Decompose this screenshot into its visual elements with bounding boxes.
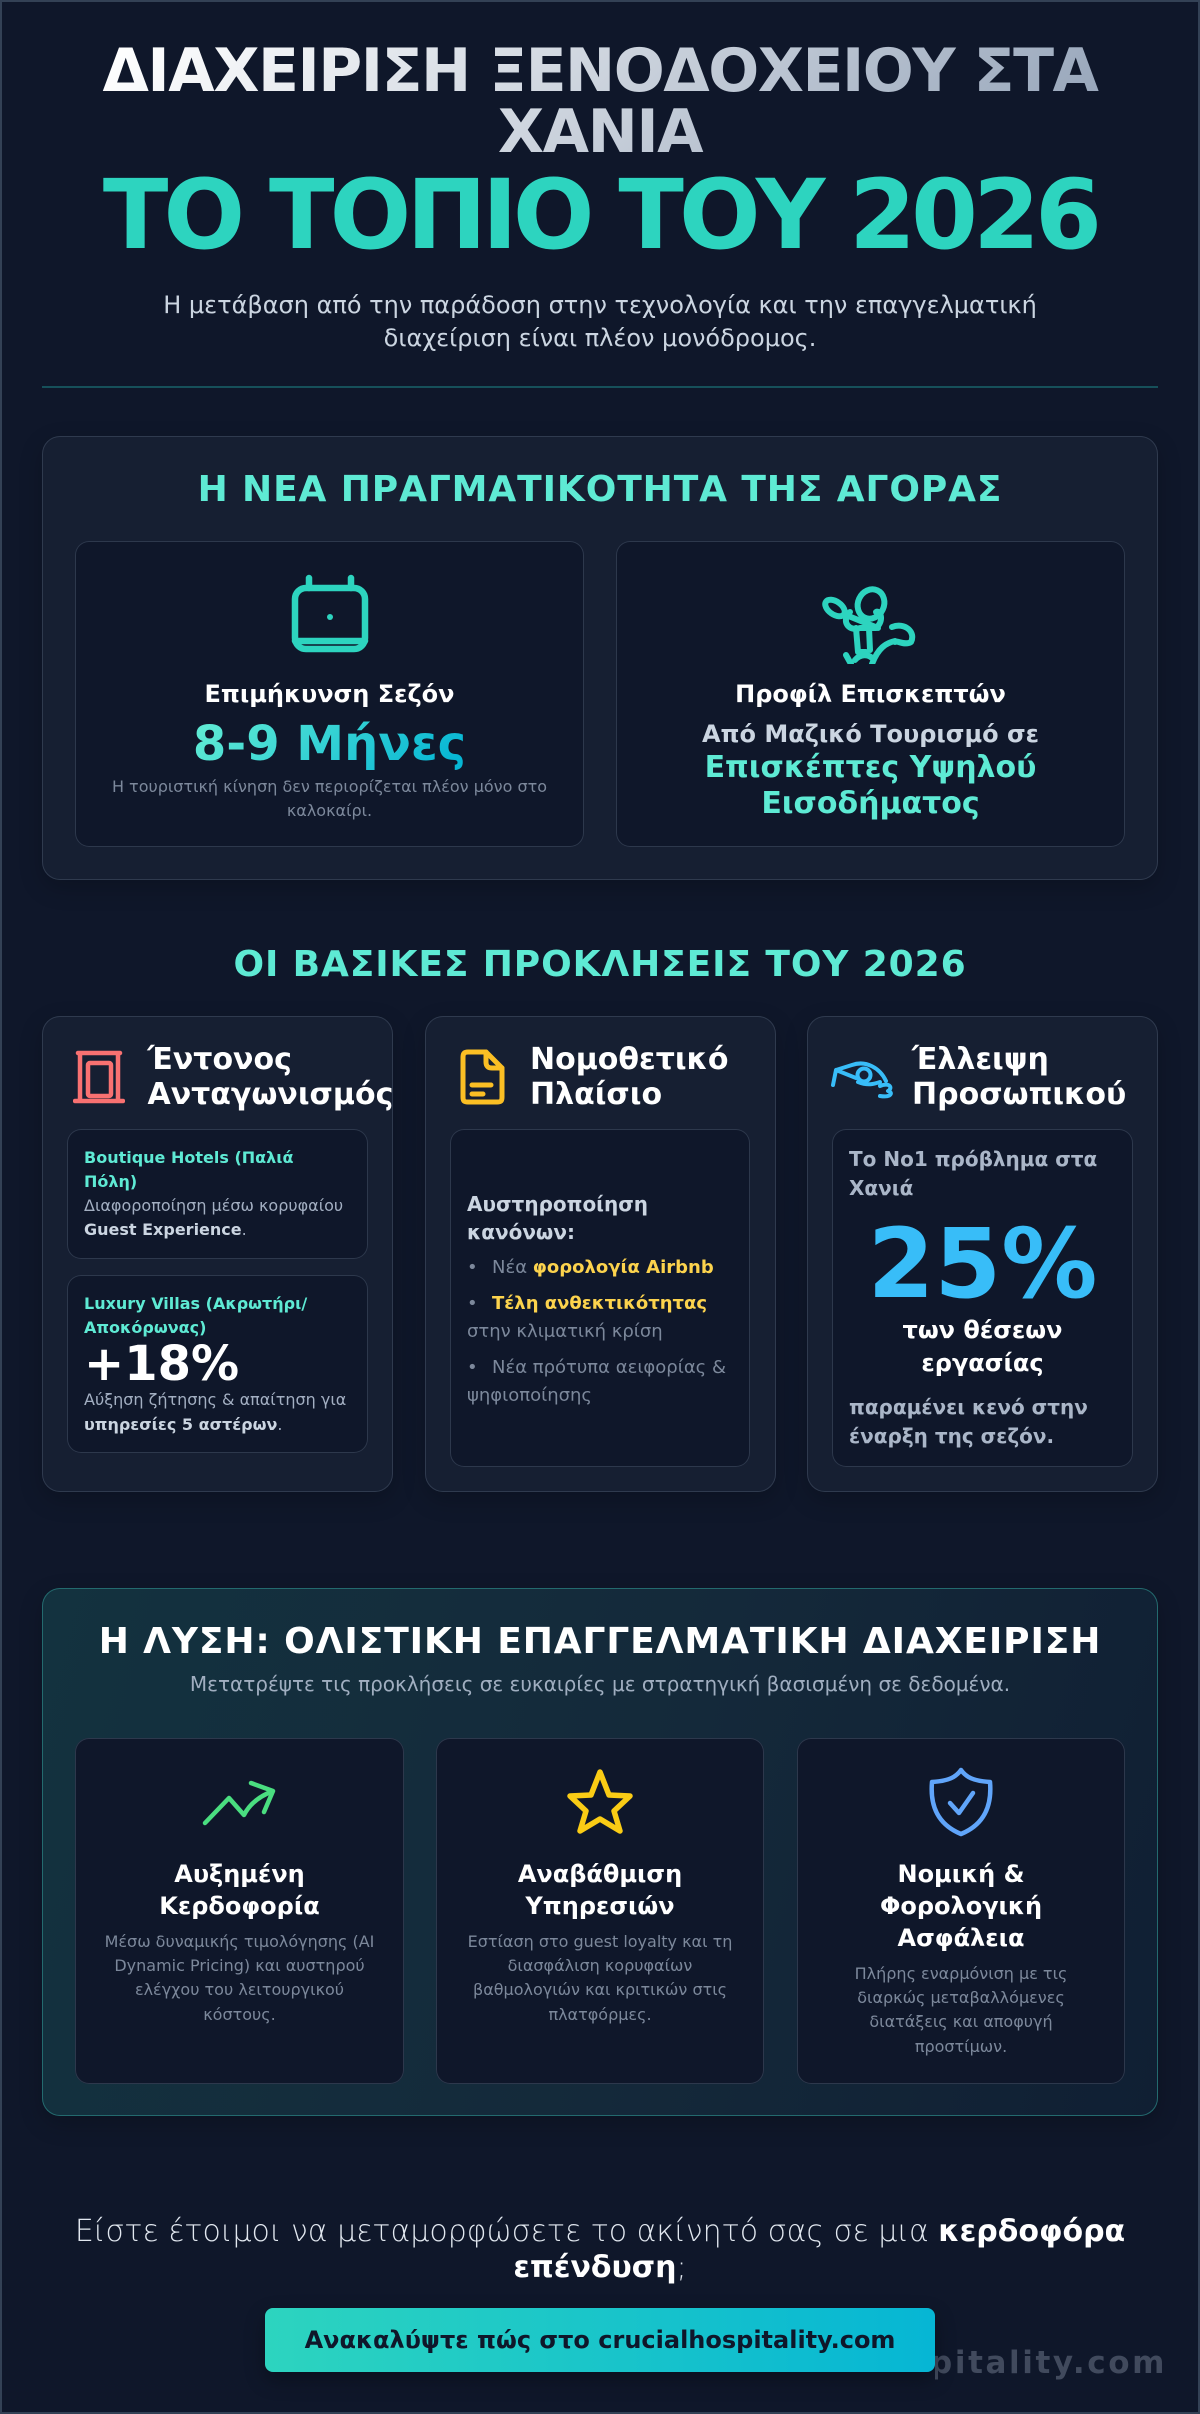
bullet: resilience fees: • — [467, 1293, 478, 1314]
box: stricter rules — [450, 1129, 750, 1467]
text: high income visitors — [705, 750, 1036, 821]
text: boutique description — [84, 1196, 343, 1239]
heading: challenges: ΟΙ ΒΑΣΙΚΕΣ ΠΡΟΚΛΗΣΕΙΣ ΤΟΥ 2026 — [233, 944, 967, 984]
text: remains vacant: έναρξη της σεζόν. — [849, 1424, 1054, 1448]
text: boutique description: Guest Experience. — [84, 1220, 247, 1239]
heading: legislation: Νομοθετικό — [530, 1042, 728, 1076]
stat: +18%: +18% — [84, 1336, 239, 1392]
card: season extension — [75, 541, 584, 847]
text: profitability description — [105, 1932, 374, 2024]
panel: staff shortage — [807, 1016, 1158, 1492]
text: number one problem: Το Νο1 πρόβλημα στα — [849, 1147, 1097, 1171]
list: rule changes — [467, 1257, 726, 1406]
text: boutique description: Διαφοροποίηση μέσω κορυφαίου — [84, 1196, 343, 1215]
icon: door — [73, 1050, 125, 1104]
icon: blue staff glyph — [831, 1061, 893, 1098]
text: services description: Εστίαση στο guest loyalty και τη — [468, 1932, 732, 1951]
stat: 8-9 months — [75, 714, 584, 774]
text: closing question — [75, 2214, 1125, 2285]
text: of positions: εργασίας — [921, 1348, 1044, 1376]
bullet: sustainability — [467, 1357, 726, 1406]
text: high income visitors: Επισκέπτες Υψηλού — [705, 750, 1036, 785]
text: villas label: Luxury Villas (Ακρωτήρι/ — [84, 1294, 307, 1313]
icon: trend arrow — [202, 1780, 276, 1826]
heading: profitability: Αυξημένη — [174, 1860, 305, 1888]
title: highlighted year line: ΤΟ ΤΟΠΙΟ ΤΟΥ 2026 — [103, 159, 1097, 271]
heading: legal safety: Ασφάλεια — [898, 1924, 1024, 1952]
button: call to action: Ανακαλύψτε πώς στο crucialhospitality.com — [305, 2326, 895, 2354]
icon: star — [567, 1769, 633, 1834]
panel: holistic solution — [42, 1588, 1158, 2116]
text: legal description — [855, 1964, 1067, 2056]
heading: legal safety: Φορολογική — [880, 1892, 1042, 1920]
text: boutique label: Boutique Hotels (Παλιά — [84, 1148, 293, 1167]
panel: legislation — [425, 1016, 776, 1492]
heading: services — [518, 1860, 682, 1920]
text: boutique label — [84, 1148, 293, 1191]
heading: legislation — [530, 1042, 728, 1112]
text: villas description: υπηρεσίες 5 αστέρων. — [84, 1415, 282, 1434]
icon: calendar — [292, 574, 368, 652]
stat: 25%: 25% — [868, 1208, 1097, 1320]
text: remains vacant: παραμένει κενό στην — [849, 1395, 1088, 1419]
text: profitability description: κόστους. — [203, 2005, 276, 2024]
heading: legal safety — [880, 1860, 1042, 1952]
text: of positions — [902, 1316, 1062, 1376]
text: legal description: Πλήρης εναρμόνιση με τις — [855, 1964, 1067, 1983]
heading: competition — [146, 1042, 393, 1112]
text: profitability description: Μέσω δυναμικής τιμολόγησης (AI — [105, 1932, 374, 1951]
box: boutique hotels — [67, 1129, 368, 1259]
text: services description: βαθμολογιών και κριτικών στις — [473, 1980, 727, 1999]
button: call to action — [265, 2308, 935, 2372]
text: services description: πλατφόρμες. — [548, 2005, 652, 2024]
heading: competition: Έντονος — [148, 1042, 292, 1076]
text: stricter rules label: Αυστηροποίηση — [467, 1192, 648, 1216]
text: boutique label: Πόλη) — [84, 1172, 137, 1191]
text: number one problem: Χανιά — [849, 1176, 913, 1200]
heading: staff shortage: Έλλειψη — [912, 1042, 1049, 1076]
text: season description: καλοκαίρι. — [287, 801, 372, 820]
panel: competition — [42, 1016, 393, 1492]
card: services — [436, 1738, 764, 2084]
heading: services: Υπηρεσιών — [525, 1892, 675, 1920]
text: services description — [468, 1932, 732, 2024]
bullet: airbnb tax: • — [467, 1257, 478, 1278]
card: visitor profile — [616, 541, 1125, 847]
text: season description: Η τουριστική κίνηση δεν περιορίζεται πλέον μόνο στο — [112, 777, 547, 796]
bullet: sustainability: Νέα πρότυπα αειφορίας & — [492, 1357, 726, 1378]
text: villas description: Αύξηση ζήτησης & απαίτηση για — [84, 1390, 346, 1409]
icon: visitor figure — [822, 586, 916, 664]
text: closing question: Είστε έτοιμοι να μεταμορφώσετε το ακίνητό σας σε μια κερδοφόρα — [75, 2214, 1125, 2249]
heading: services: Αναβάθμιση — [518, 1860, 682, 1888]
heading: profitability — [159, 1860, 320, 1920]
bullet: resilience fees: Τέλη ανθεκτικότητας — [492, 1293, 707, 1314]
text: legal description: προστίμων. — [915, 2037, 1007, 2056]
bullet: resilience fees: στην κλιματική κρίση — [467, 1321, 663, 1342]
text: villas label: Αποκόρωνας) — [84, 1318, 206, 1337]
text: services description: διασφάλιση κορυφαίων — [508, 1956, 692, 1975]
heading: solution: Η ΛΥΣΗ: ΟΛΙΣΤΙΚΗ ΕΠΑΓΓΕΛΜΑΤΙΚΗ ΔΙΑΧΕΙΡΙΣΗ — [99, 1620, 1101, 1662]
text: season description — [112, 777, 547, 820]
bullet: sustainability: • — [467, 1357, 478, 1378]
bullet: sustainability: ψηφιοποίησης — [467, 1385, 592, 1406]
text: visitor label: Προφίλ Επισκεπτών — [735, 680, 1006, 708]
card: profitability — [75, 1738, 404, 2084]
title: main heading two lines — [60, 41, 1140, 163]
text: number one problem — [849, 1147, 1097, 1200]
text: of positions: των θέσεων — [902, 1316, 1062, 1344]
heading: profitability: Κερδοφορία — [159, 1892, 320, 1920]
icon: document — [460, 1050, 504, 1104]
text: villas description — [84, 1390, 346, 1434]
text: solution subtitle: Μετατρέψτε τις προκλήσεις σε ευκαιρίες με στρατηγική βασισμένη σε δεδομένα. — [190, 1672, 1010, 1696]
text: season label: Επιμήκυνση Σεζόν — [204, 680, 454, 708]
box: luxury villas — [67, 1275, 368, 1453]
text: villas label — [84, 1294, 308, 1337]
text: legal description: διαρκώς μεταβαλλόμενες — [857, 1988, 1065, 2007]
subtitle — [163, 291, 1037, 352]
stat: 8-9 months: 8-9 Μήνες — [193, 716, 466, 772]
text: legal description: διατάξεις και αποφυγή — [869, 2012, 1053, 2031]
text: remains vacant — [849, 1395, 1088, 1448]
box: staff stat — [832, 1129, 1133, 1467]
heading: legal safety: Νομική & — [897, 1860, 1024, 1888]
text: stricter rules label — [467, 1192, 648, 1244]
text: profitability description: ελέγχου του λειτουργικού — [135, 1980, 344, 1999]
title: main heading two lines: ΔΙΑΧΕΙΡΙΣΗ ΞΕΝΟΔΟΧΕΙΟΥ ΣΤΑ — [102, 36, 1097, 106]
text: profitability description: Dynamic Pricing) και αυστηρού — [114, 1956, 365, 1975]
panel: market reality — [42, 436, 1158, 880]
card: legal safety — [797, 1738, 1125, 2084]
heading: staff shortage: Προσωπικού — [912, 1076, 1126, 1112]
bullet: airbnb tax: Νέα φορολογία Airbnb — [492, 1257, 714, 1278]
title: main heading two lines: ΧΑΝΙΑ — [498, 96, 702, 166]
text: mass tourism shift: Από Μαζικό Τουρισμό σε — [702, 720, 1039, 748]
subtitle: Η μετάβαση από την παράδοση στην τεχνολογία και την επαγγελματική — [163, 291, 1037, 319]
heading: legislation: Πλαίσιο — [530, 1076, 662, 1112]
subtitle: διαχείριση είναι πλέον μονόδρομος. — [384, 324, 816, 352]
heading: market reality: Η ΝΕΑ ΠΡΑΓΜΑΤΙΚΟΤΗΤΑ ΤΗΣ ΑΓΟΡΑΣ — [198, 468, 1002, 510]
text: stricter rules label: κανόνων: — [467, 1220, 575, 1244]
heading: competition: Ανταγωνισμός — [148, 1076, 393, 1112]
text: high income visitors: Εισοδήματος — [761, 786, 980, 821]
heading: staff shortage — [911, 1042, 1126, 1112]
text: closing question: επένδυση; — [513, 2250, 687, 2285]
bullet: resilience fees — [467, 1293, 707, 1342]
icon: shield — [929, 1768, 993, 1836]
